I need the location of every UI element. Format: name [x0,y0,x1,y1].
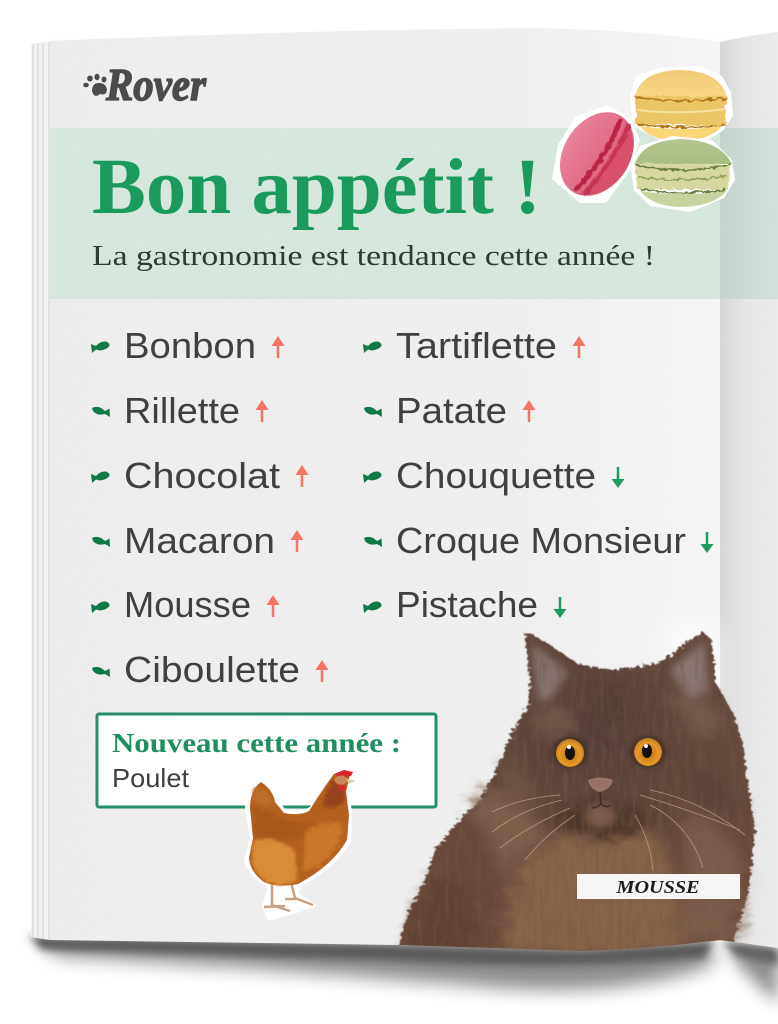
item: Chocolat: Chocolat [124,455,280,496]
left page paper [50,28,720,951]
header band on right page [720,128,778,299]
callout heading: Nouveau cette année : [112,728,401,758]
item: Pistache [363,584,566,625]
cat whiskers [492,790,745,870]
macaron: yellow [630,66,733,144]
page stack edges [31,41,50,940]
list: left column [91,325,328,690]
caption: MOUSSE [577,874,740,899]
cat nose [588,778,613,792]
cat fur strands [396,632,755,960]
chicken body [249,774,350,886]
cat mouth [592,792,610,808]
macaron: green [630,136,735,212]
chicken head [334,770,356,792]
title: Bon appétit ! [92,144,541,231]
callout: new this year [97,714,436,807]
item: Macaron: Macaron [124,520,275,561]
chicken sticker outline [244,767,359,921]
chicken legs [264,882,313,911]
item: Mousse: Mousse [124,584,251,625]
item: Bonbon: Bonbon [124,325,256,366]
logo: Rover [83,60,206,110]
callout text: Poulet [112,763,190,793]
cat eye left [552,736,588,768]
item: Tartiflette [363,325,586,366]
item: Ciboulette: Ciboulette [124,649,300,690]
item: Macaron [92,520,304,561]
cat eye right [630,736,666,768]
illustration: macarons [545,66,735,212]
right page paper [720,32,778,948]
cat fur shading [405,690,745,955]
item: Patate [364,390,536,431]
paper glow beside cat [668,625,718,825]
subtitle: La gastronomie est tendance cette année ! [92,240,655,272]
item: Patate: Patate [396,390,507,431]
page shadow [29,936,778,1004]
item: Chouquette: Chouquette [396,455,596,496]
item: Rillette [92,390,268,431]
cat ears inner [532,642,708,702]
item: Bonbon [91,325,284,366]
caption: MOUSSE: MOUSSE [615,877,700,897]
wordmark: Rover [105,60,206,110]
item: Mousse [91,584,280,625]
macaron: pink [545,98,649,210]
item: Tartiflette: Tartiflette [396,325,557,366]
header band [50,128,720,299]
item: Pistache: Pistache [396,584,538,625]
item: Rillette: Rillette [124,390,240,431]
illustration: chicken [244,767,359,921]
cat muzzle [585,804,615,828]
item: Croque Monsieur: Croque Monsieur [396,520,686,561]
item: Chocolat [91,455,308,496]
icon: paw [83,74,107,96]
item: Ciboulette [92,649,328,690]
chicken plumage [252,778,345,884]
list: right column [363,325,714,625]
illustration: cat [396,632,755,960]
cat silhouette [396,632,755,960]
